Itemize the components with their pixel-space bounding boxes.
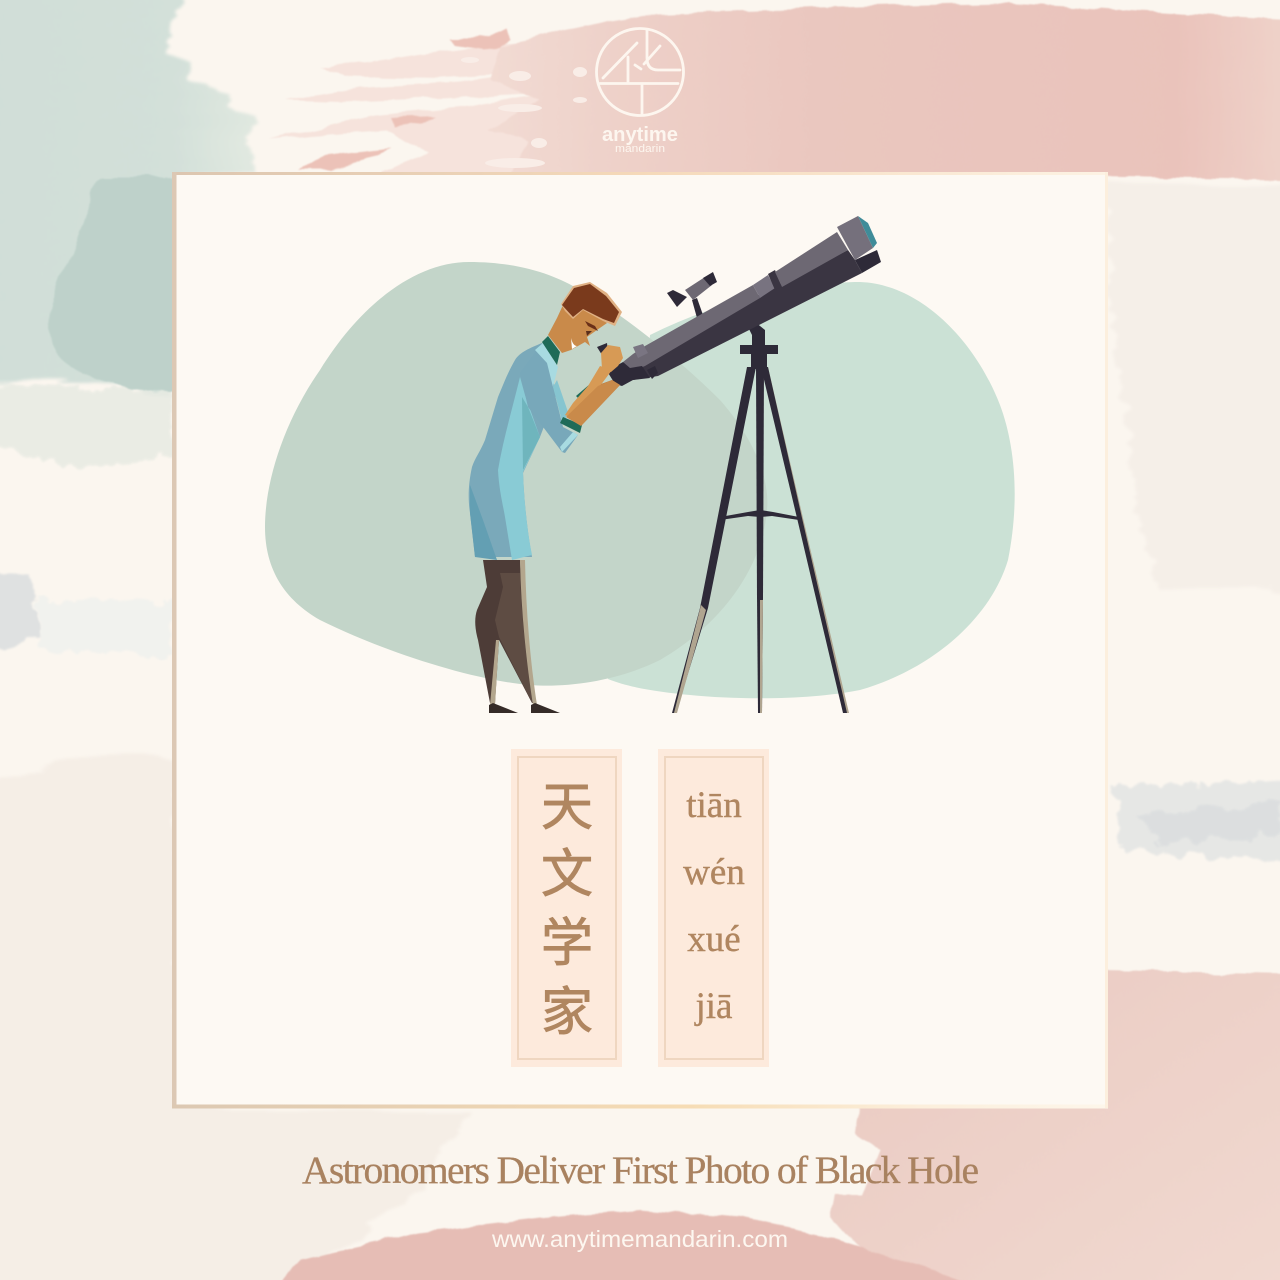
- character: wen: 文: [541, 846, 593, 904]
- illustration: astronomer with telescope: [265, 216, 1015, 713]
- end cap: [837, 216, 873, 260]
- character: jia: 家: [541, 984, 593, 1042]
- telescope: [607, 216, 881, 386]
- brush stroke: pink bottom strip: [280, 1210, 1000, 1280]
- panel: Chinese characters: [511, 749, 622, 1067]
- brush streaks: pale pink tails: [270, 40, 560, 176]
- brush stroke: grey speckles left: [0, 572, 40, 650]
- logo sub wordmark: mandarin: [615, 143, 665, 155]
- collar: [542, 336, 560, 365]
- lab coat: [469, 343, 578, 560]
- headline: Astronomers Deliver First Photo of Black Hole: [302, 1148, 979, 1192]
- finder scope: [667, 272, 717, 318]
- website url: www.anytimemandarin.com: [491, 1226, 788, 1252]
- tube underside: [625, 250, 862, 380]
- eyepiece block: [607, 362, 650, 386]
- pinyin: tian: tiān: [686, 785, 742, 826]
- hair: [561, 282, 622, 326]
- pinyin: xue: xué: [687, 919, 741, 960]
- tube front section: [775, 232, 848, 287]
- trousers: [475, 560, 537, 705]
- brush stroke: grey band right: [1116, 780, 1280, 860]
- brush stroke: pale lower-left wash: [0, 755, 470, 1280]
- neck and face: [548, 305, 607, 353]
- panel: pinyin: [658, 749, 769, 1067]
- smile: [571, 338, 577, 349]
- shoes: [489, 703, 518, 713]
- brush stroke: pink top band: [490, 3, 1280, 180]
- character: tian: 天: [541, 779, 593, 837]
- brush stroke: pale speckled band left: [0, 385, 172, 470]
- brush ovals: cream flecks in pink band: [461, 57, 587, 168]
- pinyin: jia: jiā: [694, 986, 732, 1027]
- lens: [858, 216, 877, 248]
- brush stroke: green top left: [0, 0, 258, 392]
- tripod: [672, 322, 849, 713]
- eyepiece: [597, 343, 608, 355]
- near arm: [565, 366, 612, 422]
- logo mark: [596, 28, 684, 116]
- logo wordmark: anytime: [602, 124, 678, 146]
- person: [469, 282, 623, 713]
- character: xue: 学: [541, 915, 593, 973]
- brush patches: darker pink: [298, 28, 512, 170]
- logo: anytime mandarin: [596, 28, 684, 155]
- brush stroke: dark green behind card: [49, 177, 176, 393]
- tube rear light section: [623, 285, 760, 372]
- background blob left: [265, 262, 767, 686]
- cuff: [560, 417, 582, 433]
- brush stroke: pink bottom right: [830, 970, 1280, 1280]
- coat sleeve: [520, 350, 578, 453]
- background blob right: [608, 282, 1015, 698]
- fist: [601, 345, 623, 372]
- brush stroke: pale right block: [1106, 184, 1280, 590]
- pinyin: wen: wén: [683, 852, 745, 893]
- panel: main card: [172, 172, 1108, 1108]
- far arm: [575, 380, 620, 426]
- eyebrow and eye: [585, 321, 598, 331]
